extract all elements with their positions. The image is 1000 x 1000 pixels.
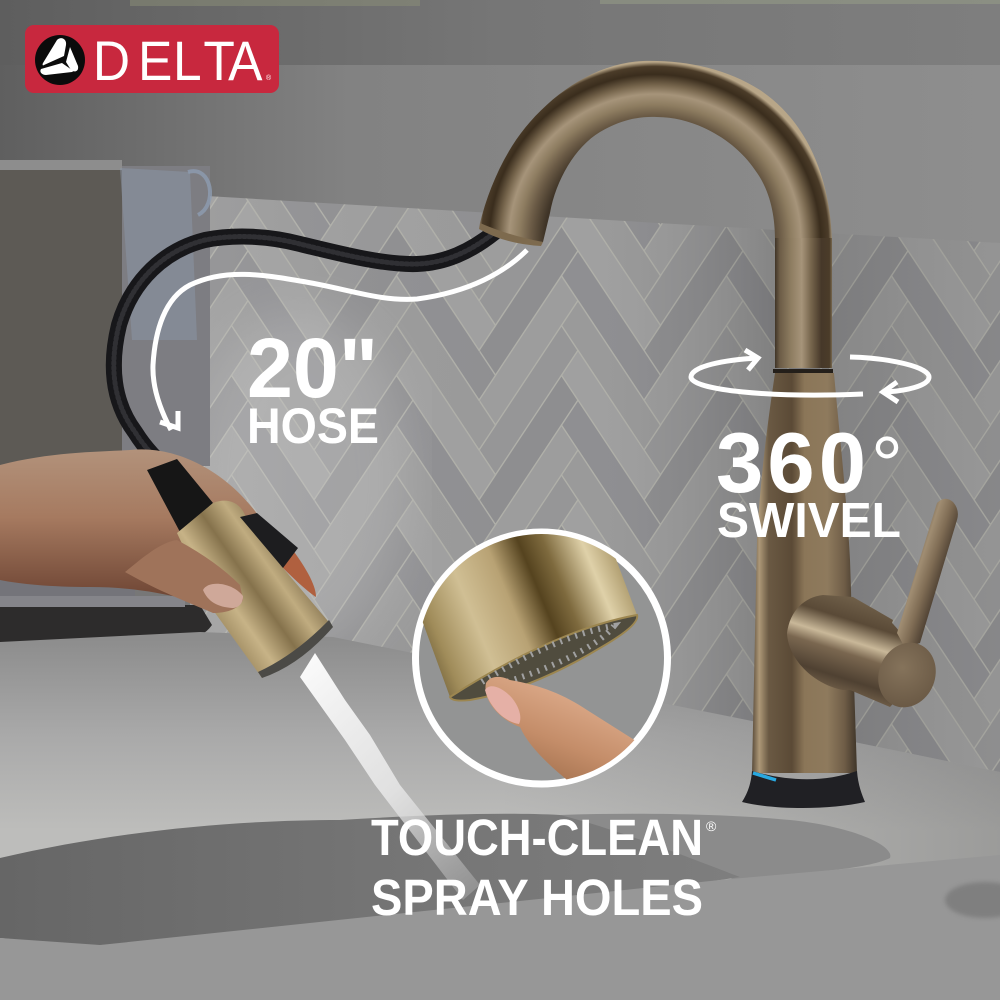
faucet: black base with blue touch light [742,771,865,808]
callout: 360 degree swivel [716,416,903,548]
inset: fingertip [485,677,636,790]
swivel arrows [691,350,929,402]
pull-down sprayer head [147,459,333,678]
callout: touch-clean spray holes [371,809,717,926]
callout: touch-clean spray holes: ® [706,818,717,834]
delta logo badge: ® [266,74,272,82]
water stream [300,653,480,900]
inset: spray holes face [450,615,637,701]
hand: palm and fingers behind sprayer [0,449,316,600]
inset: fingernail [485,686,520,724]
inset: nozzle dots [482,626,614,684]
background: appliance and blender jar [0,160,212,642]
background: counter and sink [0,632,1000,1000]
touch-clean inset circle [412,528,671,788]
delta logo badge: DELTA [93,30,263,92]
callout: touch-clean spray holes: SPRAY HOLES [371,869,703,926]
callout: 20 inch hose: HOSE [247,398,379,454]
callout: 360 degree swivel: SWIVEL [717,494,901,548]
callout: touch-clean spray holes: TOUCH-CLEAN [371,809,703,866]
callout: 20 inch hose: 20" [247,321,378,415]
black braided hose [114,232,495,470]
inset: brass sprayer cup [422,534,636,696]
faucet: gooseneck spout [479,61,832,368]
white swoop arrow: hose reach [153,250,527,430]
delta logo badge [25,25,279,93]
faucet: handle and lever [787,499,958,716]
background: kitchen wall and shelf [0,0,1000,790]
faucet: lower body [752,369,857,773]
callout: 360 degree swivel: ° [871,420,903,509]
callout: 360 degree swivel: 360 [716,416,866,511]
hand: thumb over sprayer [125,540,243,613]
